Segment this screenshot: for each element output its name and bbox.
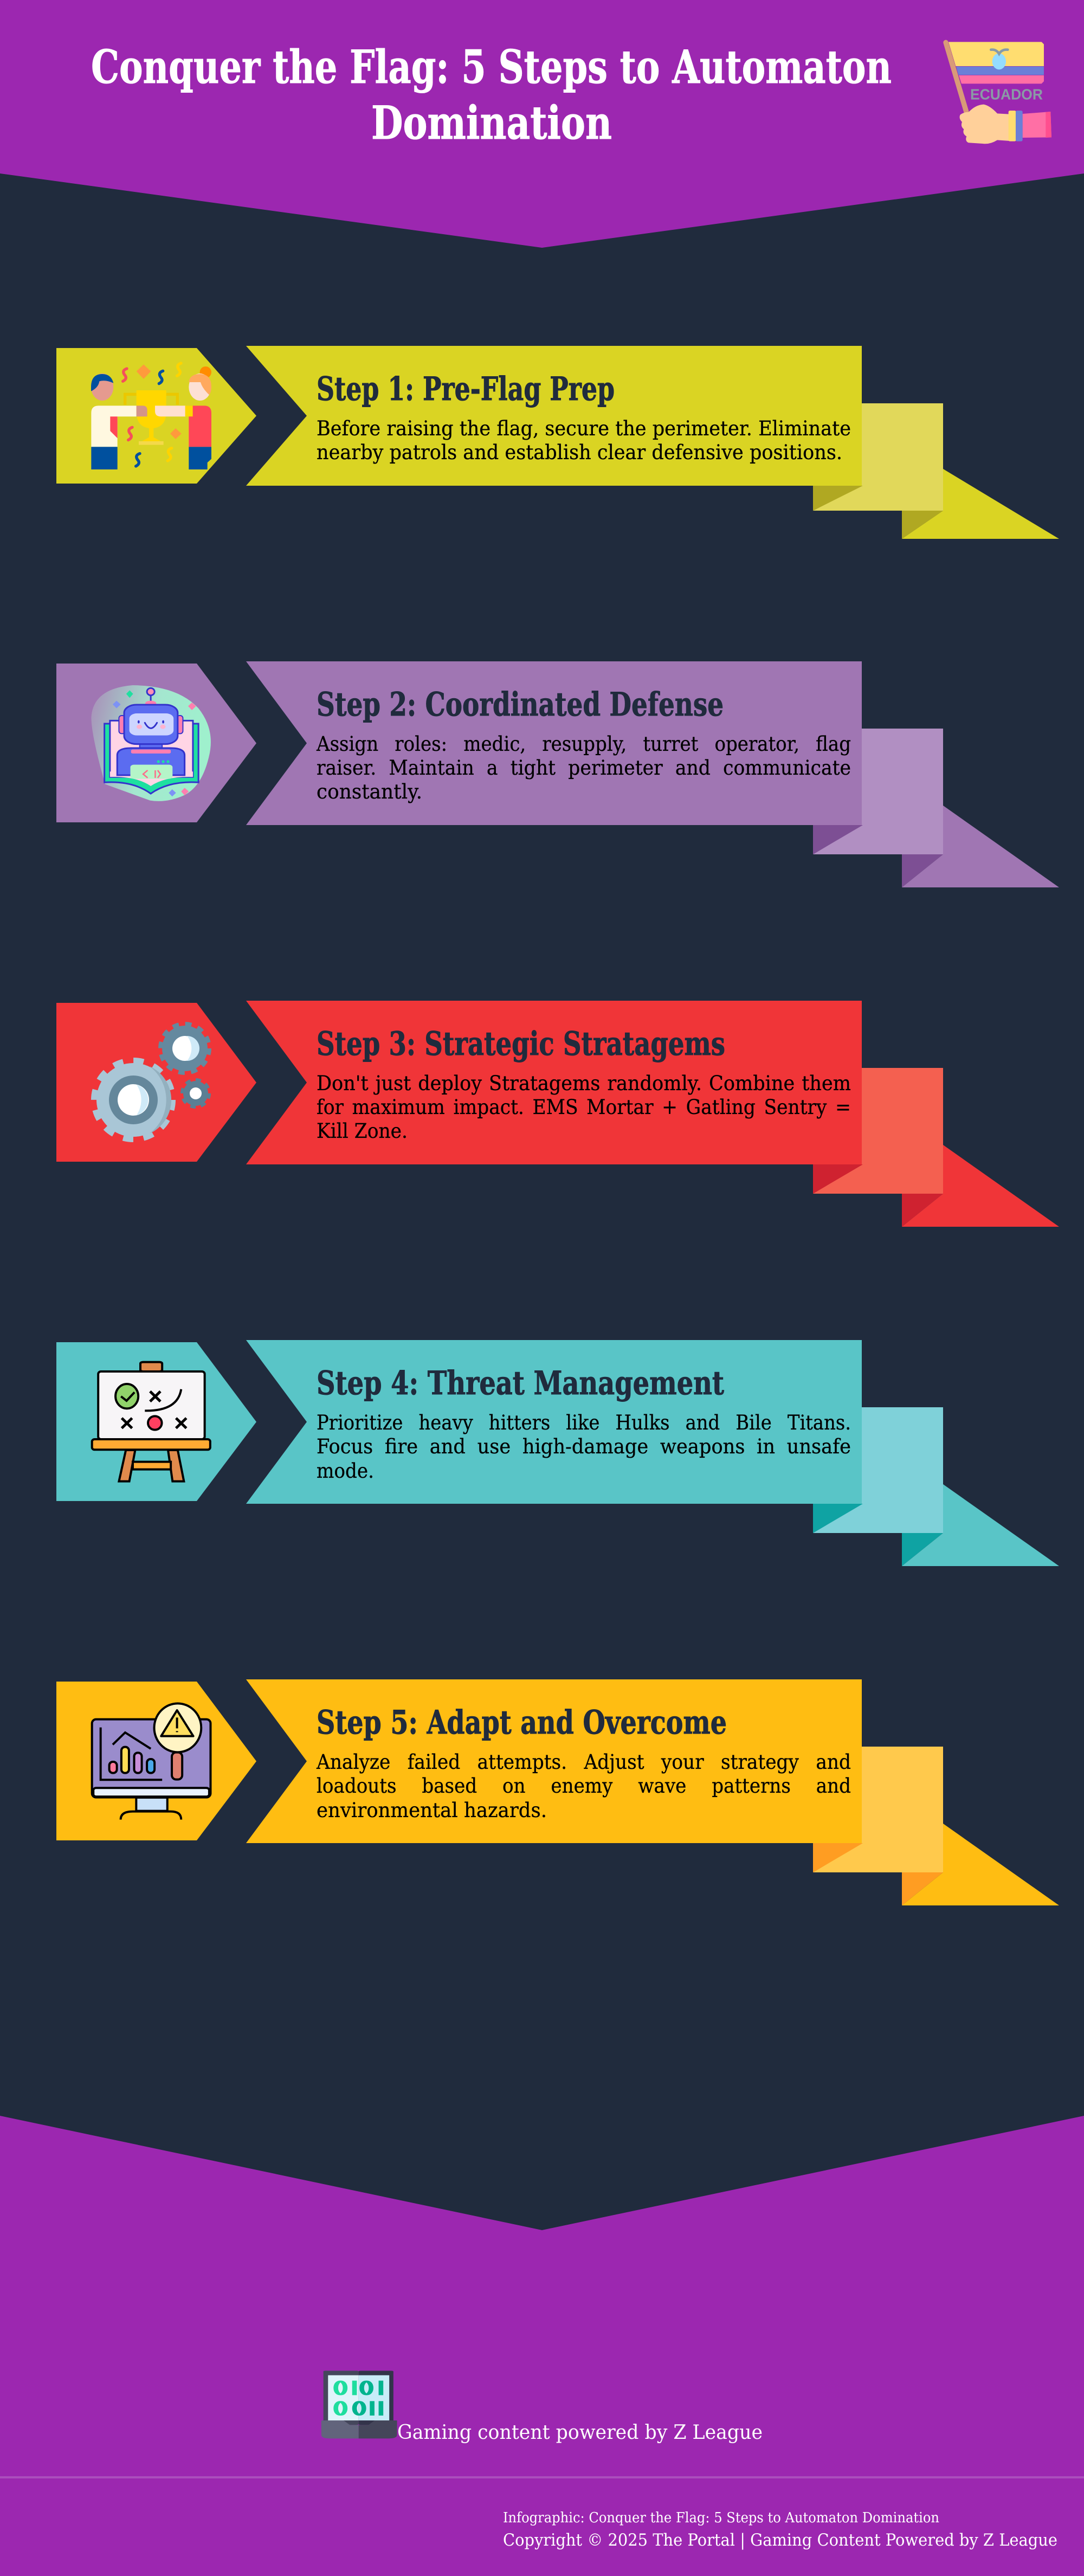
icon: hand holding Ecuador flag: ECUADOR — [970, 86, 1043, 102]
text: step 5: Analyze failed attempts. Adjust your strategy and — [316, 1750, 851, 1774]
text: step 4: Focus fire and use high-damage weapons in unsafe — [317, 1435, 851, 1458]
tag: step 4 — [56, 1342, 256, 1501]
ribbon: step 4 — [246, 1340, 1059, 1566]
footer text: Copyright © 2025 The Portal | Gaming Content Powered by Z League — [503, 2530, 1057, 2550]
icon: binary code device — [321, 2371, 397, 2438]
icon: teammates with trophy — [91, 363, 211, 469]
text: step 2: Assign roles: medic, resupply, turret operator, flag — [316, 732, 851, 756]
text: step 5 — [316, 1750, 851, 1822]
title: Domination — [371, 96, 612, 150]
footer text — [503, 2510, 1057, 2550]
footer banner — [0, 2116, 1084, 2576]
ribbon: step 3 — [246, 1001, 1059, 1227]
icon: hand holding Ecuador flag — [946, 42, 1051, 144]
text: step 1: Before raising the flag, secure the perimeter. Eliminate — [317, 417, 851, 440]
icon: tactics easel — [92, 1362, 210, 1482]
ribbon: step 2 — [246, 661, 1059, 887]
text: step 4: mode. — [317, 1459, 374, 1483]
text: step 3: for maximum impact. EMS Mortar + Gatling Sentry = — [317, 1096, 851, 1119]
powered-by text: Gaming content powered by Z League — [397, 2422, 763, 2444]
ribbon: step 1 — [246, 346, 1059, 539]
ribbon: step 5 — [246, 1679, 1059, 1905]
text: step 1 — [317, 417, 851, 464]
header banner — [0, 0, 1084, 248]
text: step 2: raiser. Maintain a tight perimeter and communicate — [317, 756, 851, 780]
text: step 3: Kill Zone. — [317, 1119, 408, 1143]
icon: robot on book — [91, 685, 211, 801]
tag: step 1 — [56, 348, 256, 484]
text: step 4 — [317, 1411, 851, 1483]
tag: step 2 — [56, 664, 256, 822]
heading: step 2: Step 2: Coordinated Defense — [317, 686, 724, 724]
step 1 panel — [56, 346, 1059, 539]
tag: step 5 — [56, 1682, 256, 1840]
step 4 panel — [56, 1340, 1059, 1566]
text: step 3 — [317, 1072, 851, 1143]
tag: step 3 — [56, 1003, 256, 1162]
icon: monitor with warning magnifier — [92, 1703, 210, 1820]
step 2 panel — [56, 661, 1059, 887]
step 5 panel — [56, 1679, 1059, 1905]
heading: step 3: Step 3: Strategic Stratagems — [317, 1025, 725, 1063]
text: step 4: Prioritize heavy hitters like Hulks and Bile Titans. — [317, 1411, 851, 1434]
heading: step 5: Step 5: Adapt and Overcome — [317, 1704, 727, 1742]
text: step 1: nearby patrols and establish clear defensive positions. — [317, 441, 842, 464]
text: step 5: environmental hazards. — [317, 1799, 547, 1822]
step 3 panel — [56, 1001, 1059, 1227]
icon: gears — [94, 1024, 209, 1139]
footer text: Infographic: Conquer the Flag: 5 Steps to Automaton Domination — [503, 2510, 939, 2526]
text: step 2: constantly. — [317, 780, 422, 803]
heading: step 4: Step 4: Threat Management — [317, 1364, 724, 1402]
text: step 5: loadouts based on enemy wave patterns and — [317, 1774, 851, 1798]
text: step 2 — [316, 732, 851, 803]
heading: step 1: Step 1: Pre-Flag Prep — [317, 370, 615, 408]
title — [91, 40, 892, 150]
footer divider — [0, 2476, 1084, 2478]
text: step 3: Don't just deploy Stratagems randomly. Combine them — [317, 1072, 851, 1095]
